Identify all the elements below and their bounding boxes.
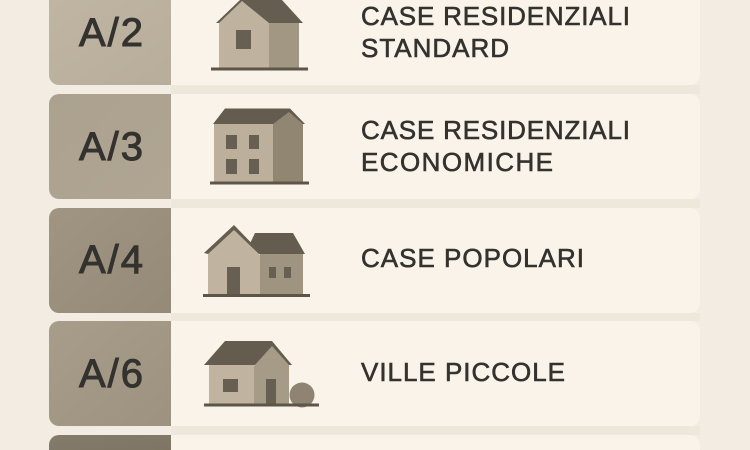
label line 2: ECONOMICHE	[361, 147, 553, 177]
label line 2: STANDARD	[361, 33, 509, 63]
card: partial	[49, 435, 700, 450]
row: A/2 case residenziali standard	[49, 0, 700, 85]
icon: two houses A/4	[203, 225, 310, 297]
card: A/2	[49, 0, 700, 85]
code: A/6: A/6	[79, 352, 143, 396]
badge: partial	[49, 435, 171, 450]
badge: A/3	[49, 94, 171, 199]
code: A/4: A/4	[79, 238, 143, 282]
icon: house A/2	[211, 0, 308, 70]
label: ville piccole: VILLE PICCOLE	[361, 357, 565, 387]
badge: A/4	[49, 208, 171, 313]
badge: A/6	[49, 321, 171, 426]
icon: house A/3	[210, 108, 309, 184]
card: A/3	[49, 94, 700, 199]
label: case residenziali standard: CASE RESIDENZIALI	[361, 1, 630, 31]
row: A/6 ville piccole	[49, 321, 700, 426]
label: case residenziali economiche: CASE RESIDENZIALI	[361, 115, 630, 145]
row: A/3 case residenziali economiche	[49, 94, 700, 199]
code: A/2: A/2	[79, 11, 143, 55]
code: A/3: A/3	[79, 125, 143, 169]
card: A/4	[49, 208, 700, 313]
card: A/6	[49, 321, 700, 426]
row: A/4 case popolari	[49, 208, 700, 313]
row: partial next row	[49, 435, 700, 450]
badge: A/2	[49, 0, 171, 85]
icon: villa with bush A/6	[204, 341, 319, 408]
label: case popolari: CASE POPOLARI	[361, 243, 584, 273]
